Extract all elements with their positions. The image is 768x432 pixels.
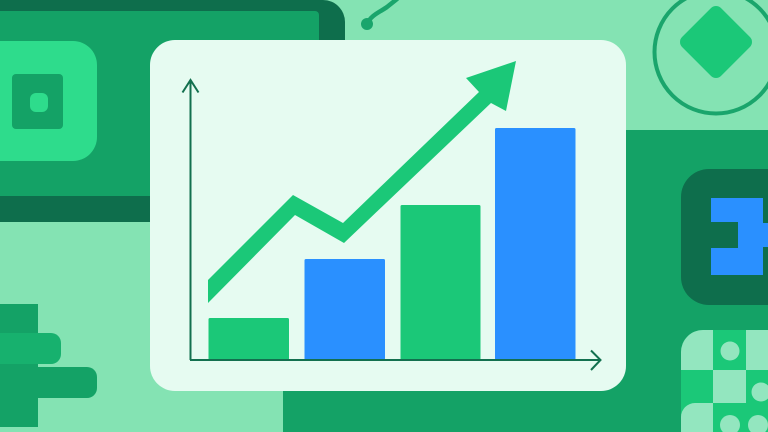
bar chart [208, 128, 576, 360]
panel: top left inner green [0, 11, 319, 196]
panel: top left dark frame [0, 0, 345, 222]
icon: light green square badge [0, 41, 97, 161]
trend arrow [208, 61, 516, 303]
icon: ring with diamond [654, 0, 768, 114]
y axis arrow [182, 80, 198, 360]
x axis arrow [190, 350, 600, 370]
icon: curved stroke at top [361, 0, 397, 30]
icon: dark tile with blue glyph [681, 169, 768, 305]
icon: checker tile [681, 330, 768, 432]
icon: stacked bars bottom left [0, 304, 97, 427]
panel: chart card [150, 40, 626, 391]
panel: lower right green block [283, 130, 768, 432]
